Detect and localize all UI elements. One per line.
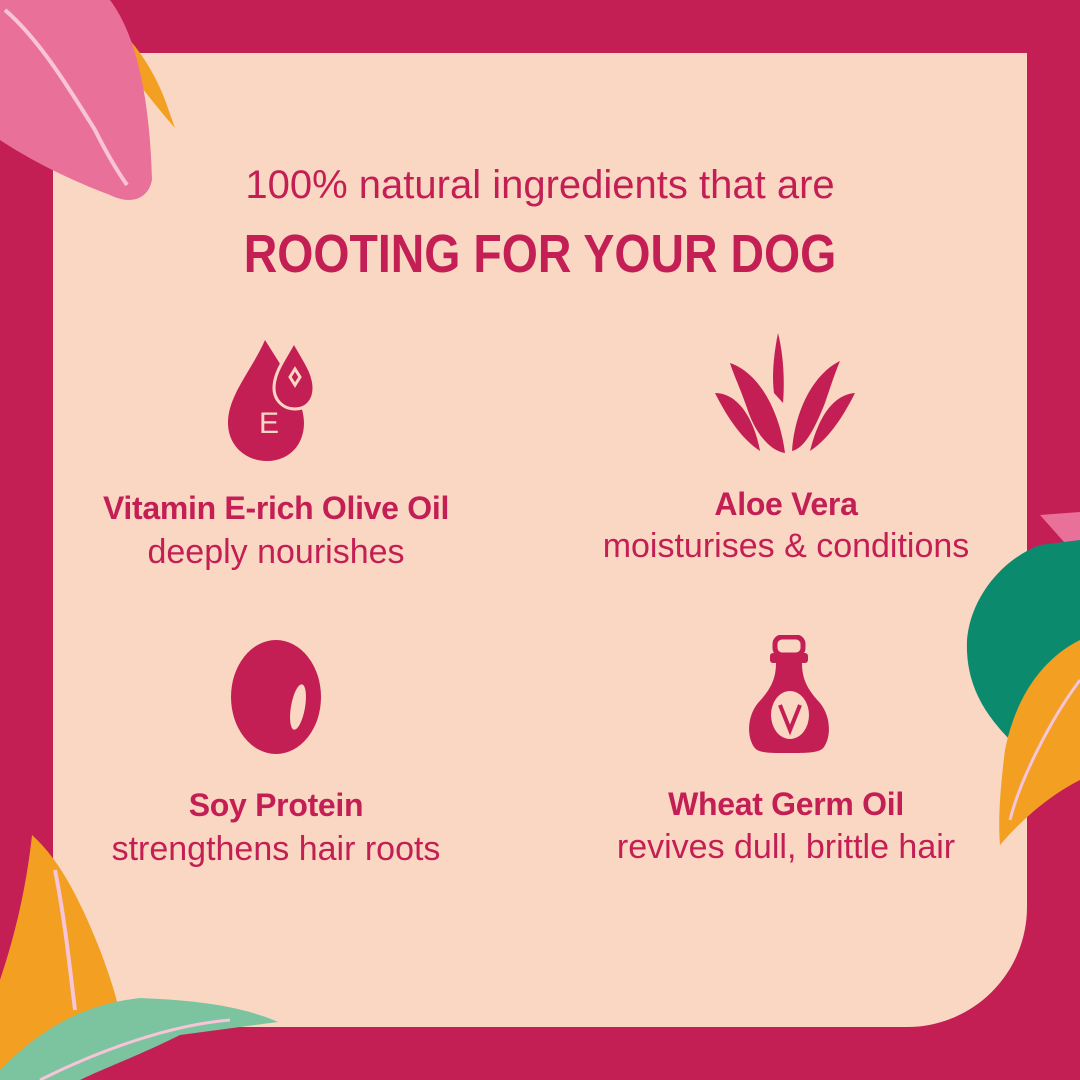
item: soy protein xyxy=(112,640,440,868)
item: aloe vera xyxy=(603,333,969,565)
desc: strengthens hair roots xyxy=(112,830,440,868)
desc: deeply nourishes xyxy=(147,533,405,571)
leaves right xyxy=(967,512,1080,845)
icon: aloe xyxy=(715,333,855,453)
item: wheat germ oil xyxy=(617,635,955,866)
desc: revives dull, brittle hair xyxy=(617,828,955,866)
label: Wheat Germ Oil xyxy=(668,786,904,822)
icon: drops xyxy=(228,340,312,461)
icon: drops: E xyxy=(259,407,279,440)
item: olive oil xyxy=(103,340,449,571)
label: Aloe Vera xyxy=(714,486,858,522)
icon: bottle xyxy=(749,635,829,753)
leaf top-left xyxy=(0,0,175,200)
label: Soy Protein xyxy=(189,787,363,823)
title: ROOTING FOR YOUR DOG xyxy=(244,224,836,284)
subtitle: 100% natural ingredients that are xyxy=(245,163,835,207)
label: Vitamin E-rich Olive Oil xyxy=(103,490,449,526)
icon: bean xyxy=(231,640,321,754)
desc: moisturises & conditions xyxy=(603,527,969,565)
leaves bottom-left xyxy=(0,835,278,1080)
